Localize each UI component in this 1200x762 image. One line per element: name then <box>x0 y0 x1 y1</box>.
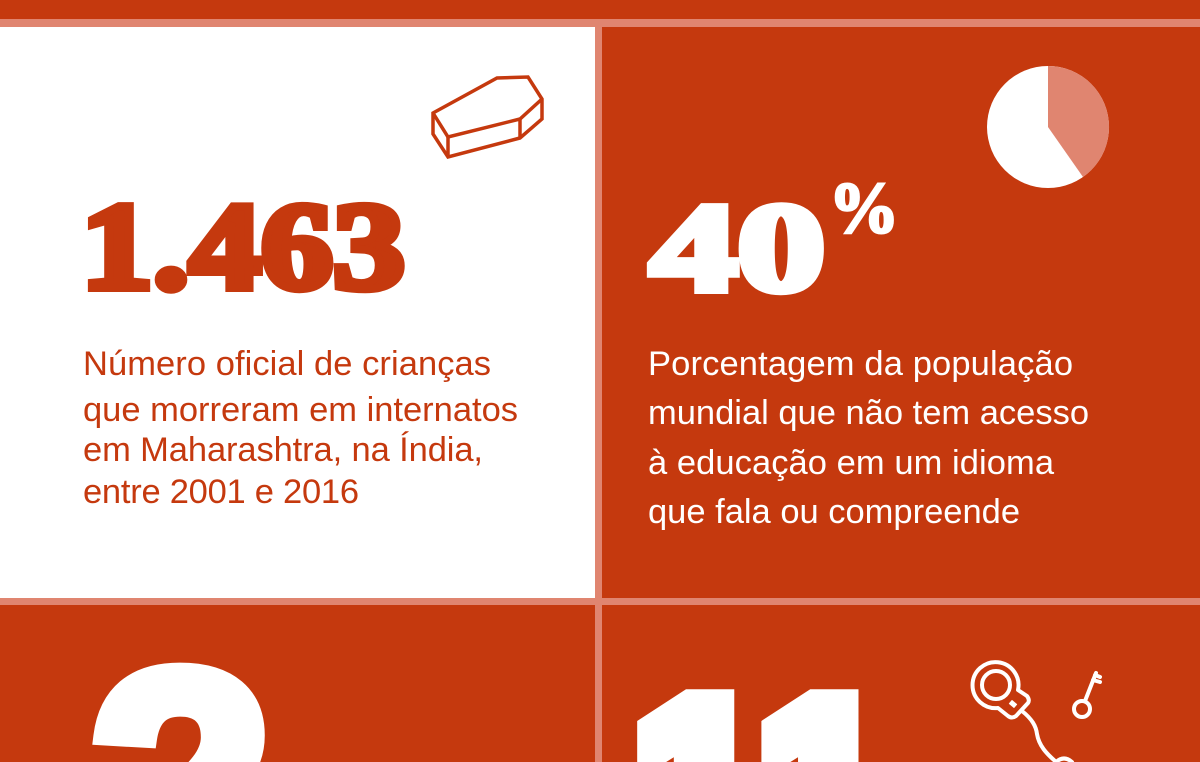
statistic: 40% <box>650 168 899 318</box>
text: deaths description: Número oficial de crianças <box>83 345 491 383</box>
panel: language access in education <box>648 66 1109 531</box>
text: language description <box>648 345 1089 531</box>
text: language description: à educação em um idioma <box>648 444 1055 482</box>
icon: handcuffs <box>973 662 1072 762</box>
text: deaths description <box>83 345 518 511</box>
text: language description: que fala ou compreende <box>648 493 1020 531</box>
text: language description: Porcentagem da população <box>648 345 1073 383</box>
icon: pie chart showing 40 percent <box>987 66 1109 188</box>
icon: key <box>1074 673 1100 717</box>
statistic: 40%: 40 <box>650 179 825 318</box>
text: deaths description: entre 2001 e 2016 <box>83 473 359 511</box>
statistic: 1.463: 1.463 <box>81 178 405 315</box>
icon: coffin <box>433 77 542 157</box>
panel: deaths in boarding schools <box>0 27 595 598</box>
text: language description: mundial que não tem acesso <box>648 394 1089 432</box>
text: deaths description: em Maharashtra, na Índia, <box>83 430 483 469</box>
statistic: 40%: % <box>829 168 899 248</box>
text: deaths description: que morreram em internatos <box>83 391 518 429</box>
